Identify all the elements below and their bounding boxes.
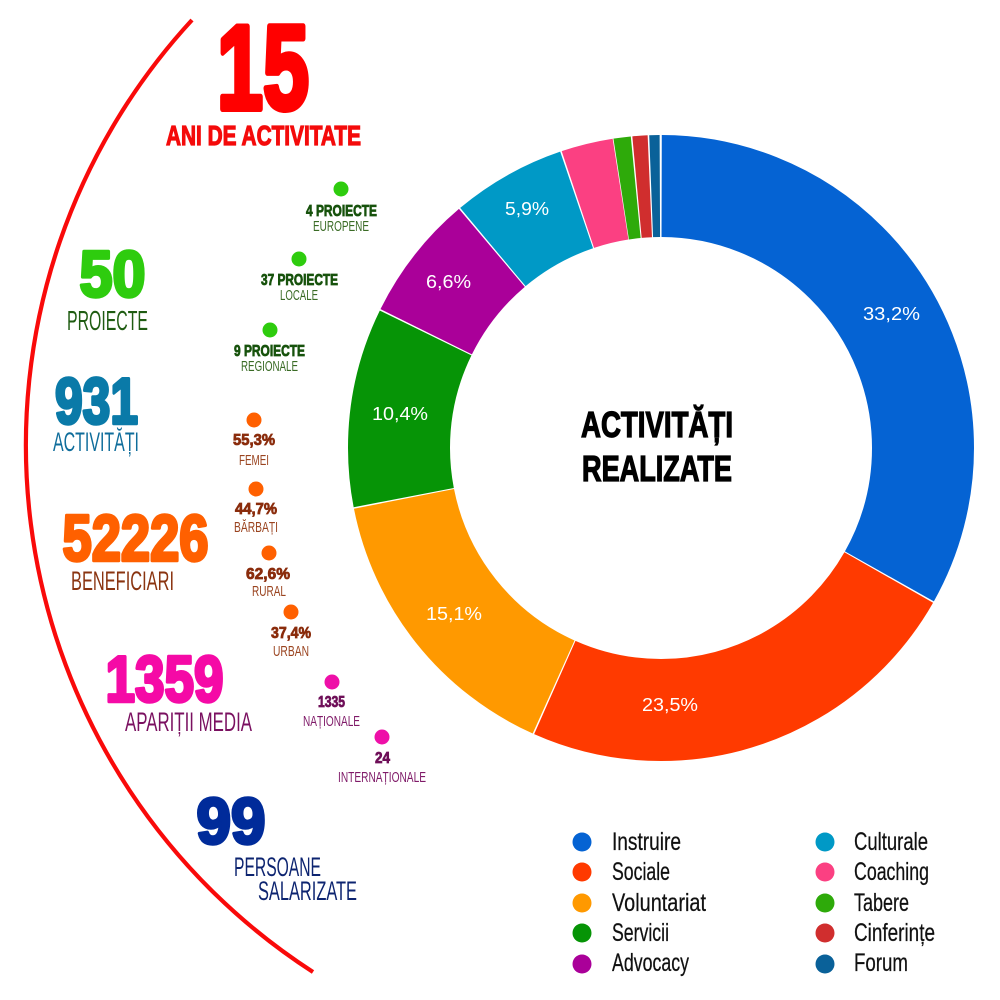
item: international: INTERNAȚIONALE [338,769,426,786]
percentage labels: 6,6% [426,272,471,292]
item: 4 european projects [306,182,377,235]
legend: forum: Forum [854,949,908,977]
percentage labels: 5,9% [505,199,549,219]
legend: culturale [816,828,928,856]
item: 4 european projects: 4 PROIECTE [306,203,377,220]
stat: 52226 beneficiaries [62,502,208,596]
legend: instruire [572,828,681,856]
caption persoane salarizate [234,852,357,906]
legend: sociale [572,858,670,886]
legend: culturale: Culturale [854,828,928,856]
stat: 50 projects [67,238,148,336]
caption beneficiari: BENEFICIARI [71,566,174,596]
percentage labels [372,199,920,715]
legend: forum [816,949,908,977]
caption aparitii media: APARIȚII MEDIA [125,707,252,737]
legend: voluntariat [572,889,706,917]
item: national [303,674,360,730]
item: rural [246,546,290,600]
item: men: 44,7% [235,501,277,518]
donut chart [372,186,923,715]
item: national: 1335 [318,694,345,711]
donut center title [581,404,733,489]
item: 37 local projects: 37 PROIECTE [261,272,338,289]
item: 9 regional projects: 9 PROIECTE [234,343,305,360]
number 15: 15 [217,1,309,135]
item: 37 local projects: LOCALE [280,287,318,304]
project breakdown [234,182,377,375]
item: 9 regional projects [234,322,305,375]
legend: servicii: Servicii [612,919,669,947]
caption persoane salarizate: PERSOANE [234,852,321,882]
red arc [26,20,313,972]
number 52226: 52226 [62,502,208,574]
item: international [338,730,426,786]
media breakdown [303,674,426,786]
legend: advocacy [572,949,689,977]
number 50: 50 [80,238,146,310]
caption proiecte: PROIECTE [67,305,148,336]
legend: servicii [572,919,669,947]
legend: advocacy: Advocacy [612,949,689,977]
stat: 99 employees [196,784,357,906]
stat: 1359 media appearances [106,642,252,737]
legend: cinferinte [816,919,935,947]
legend: instruire: Instruire [612,828,681,856]
percentage labels: 33,2% [863,304,920,324]
stat: 15 years of activity [166,1,361,151]
item: 4 european projects: EUROPENE [313,218,369,235]
item: national: NAȚIONALE [303,713,360,730]
item: women: 55,3% [233,432,275,449]
number 1359: 1359 [106,642,224,716]
legend [572,828,935,977]
legend: tabere: Tabere [854,889,909,917]
legend: coaching: Coaching [854,858,929,886]
donut center title: REALIZATE [582,448,732,489]
item: women: FEMEI [239,452,269,469]
caption ani de activitate: ANI DE ACTIVITATE [166,120,361,151]
item: urban: 37,4% [271,625,311,642]
item: rural: RURAL [252,583,286,600]
item: rural: 62,6% [246,566,290,583]
legend: tabere [816,889,909,917]
item: urban [271,604,311,660]
item: men [234,482,278,536]
legend: cinferinte: Cinferințe [854,919,935,947]
item: urban: URBAN [273,643,309,660]
item: 9 regional projects: REGIONALE [241,358,298,375]
percentage labels: 15,1% [426,604,482,624]
stat: 931 activities [53,364,139,457]
number 99: 99 [196,784,266,858]
item: 37 local projects [261,252,338,304]
legend: sociale: Sociale [612,858,670,886]
caption persoane salarizate: SALARIZATE [258,876,357,906]
donut center title: ACTIVITĂȚI [581,404,733,445]
legend: voluntariat: Voluntariat [612,889,706,917]
percentage labels: 10,4% [372,404,428,424]
percentage labels: 23,5% [642,695,698,715]
item: international: 24 [375,750,390,767]
legend: coaching [816,858,929,886]
number 931: 931 [55,364,138,438]
caption activitati: ACTIVITĂȚI [53,427,139,457]
item: women [233,412,275,469]
item: men: BĂRBAȚI [234,519,278,536]
beneficiary breakdown [233,412,311,660]
